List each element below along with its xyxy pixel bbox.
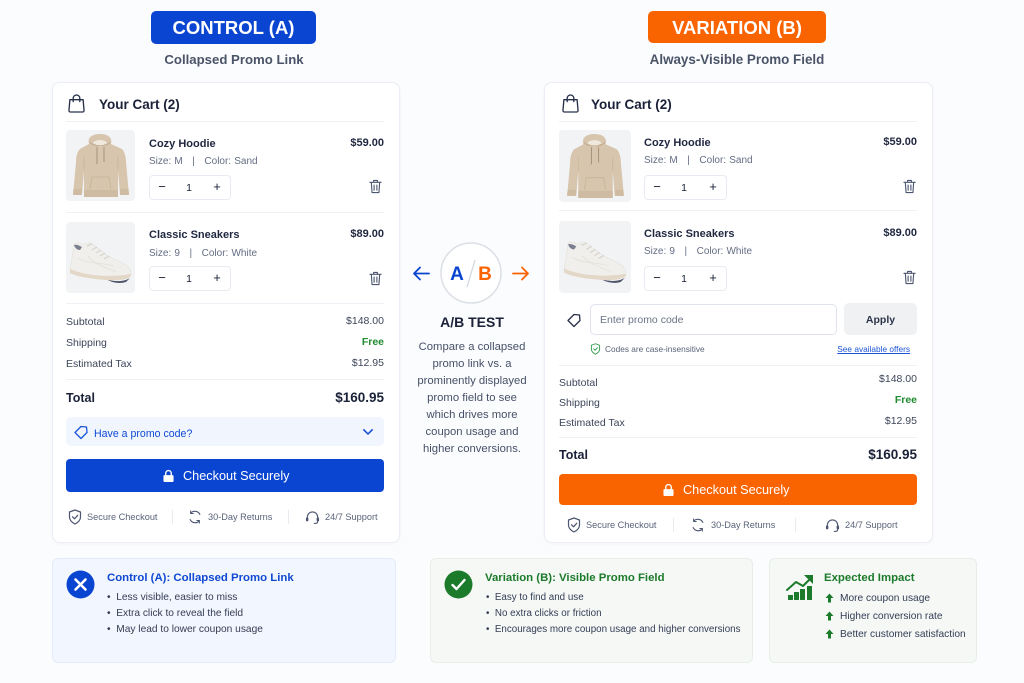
arrow: left blue (413, 266, 430, 280)
card: expected impact (769, 558, 977, 663)
tax row (66, 357, 384, 370)
options: hoodie: Size: M | Color: Sand (149, 156, 258, 167)
subtotal row (559, 373, 917, 389)
shipping row (66, 336, 384, 349)
promo hint: Codes are case-insensitive (605, 344, 705, 354)
card bullets: • Extra click to reveal the field (107, 608, 243, 619)
subtotal row: Subtotal (559, 377, 598, 389)
trust row (568, 517, 898, 533)
icon: lock (663, 484, 674, 496)
badge: control A (151, 11, 316, 44)
impact item: Better customer satisfaction (840, 629, 966, 640)
quantity stepper: hoodie: 1 (681, 182, 687, 194)
product name: hoodie: Cozy Hoodie (644, 137, 711, 149)
returns label: 30-Day Returns (208, 512, 272, 522)
offers link: See available offers (837, 344, 910, 354)
impact item: More coupon usage (840, 593, 930, 604)
tax row: Estimated Tax (66, 358, 132, 370)
cart heading: Your Cart (2) (99, 97, 180, 112)
icon: support (826, 519, 840, 532)
card bullets: • Easy to find and use (486, 592, 584, 603)
description: promo field to see (427, 392, 517, 404)
tax row: Estimated Tax (559, 417, 625, 429)
impact item: Higher conversion rate (840, 611, 942, 622)
shipping row: Shipping (66, 337, 107, 349)
shipping row (559, 394, 917, 409)
icon: trash (369, 272, 382, 286)
quantity stepper: hoodie: − (653, 179, 661, 194)
icon: promo tag (74, 426, 88, 440)
shipping row: Free (362, 336, 384, 348)
card bullets (107, 592, 263, 635)
options: sneakers: Size: 9 | Color: White (149, 248, 257, 259)
A/B test centre column (413, 242, 529, 455)
icon: shield (68, 509, 82, 525)
support label: 24/7 Support (325, 512, 378, 522)
tax row: $12.95 (352, 357, 384, 369)
quantity stepper: sneakers: 1 (186, 273, 192, 285)
quantity stepper: sneakers (644, 266, 727, 291)
card title: Control (A): Collapsed Promo Link (107, 572, 294, 584)
card bullets: • Less visible, easier to miss (107, 592, 237, 603)
options: sneakers: Size: 9 | Color: White (644, 246, 752, 257)
icon: green shield (590, 343, 600, 355)
subtotal row (66, 315, 384, 328)
shipping row: Free (895, 394, 917, 406)
icon: A/B circle (440, 242, 502, 304)
quantity stepper: hoodie (644, 175, 727, 200)
apply button (844, 303, 917, 335)
secure checkout label: Secure Checkout (586, 520, 656, 530)
support label: 24/7 Support (845, 520, 898, 530)
badge: variation B (648, 11, 826, 43)
price: sneakers: $89.00 (883, 227, 917, 239)
promo link text: Have a promo code? (94, 428, 192, 440)
subtotal row: $148.00 (879, 373, 917, 385)
card: variation summary (430, 558, 753, 663)
returns label: 30-Day Returns (711, 520, 775, 530)
cart heading: Your Cart (2) (591, 97, 672, 112)
icon: A/B circle: A (450, 264, 464, 285)
quantity stepper: sneakers: − (158, 270, 166, 285)
icon: chevron (363, 429, 373, 435)
card title: Expected Impact (824, 572, 915, 584)
description: Compare a collapsed (419, 341, 525, 353)
icon: trash (903, 180, 916, 194)
icon: trash (903, 270, 916, 284)
card bullets: • No extra clicks or friction (486, 608, 602, 619)
panel: control cart (52, 82, 400, 543)
description: promo link vs. a (432, 358, 512, 370)
panel: variation cart (544, 82, 933, 543)
product name: sneakers: Classic Sneakers (149, 229, 240, 241)
subtitle: control: Collapsed Promo Link (164, 52, 304, 67)
promo input: Enter promo code (600, 314, 683, 326)
button label: Checkout Securely (683, 483, 790, 497)
options: hoodie: Size: M | Color: Sand (644, 155, 753, 166)
product image: sneakers (559, 221, 631, 293)
quantity stepper: hoodie (149, 175, 231, 200)
icon: shield (568, 517, 580, 533)
quantity stepper: hoodie: + (213, 179, 221, 194)
icon: up arrow (825, 629, 834, 639)
shipping row: Shipping (559, 397, 600, 409)
total row: Total (66, 391, 95, 405)
total row: $160.95 (868, 447, 917, 462)
description: coupon usage and (426, 426, 518, 438)
quantity stepper: hoodie: + (709, 179, 717, 194)
product name: sneakers: Classic Sneakers (644, 228, 735, 240)
icon: returns (692, 518, 704, 532)
icon: bag (562, 94, 579, 113)
icon: promo tag (567, 314, 581, 328)
product image: sneakers (66, 222, 135, 293)
icon: trash (369, 180, 382, 194)
card title: Variation (B): Visible Promo Field (485, 572, 665, 584)
icon: lock (163, 470, 174, 482)
tax row (559, 415, 917, 429)
icon: A/B circle: B (478, 264, 492, 285)
quantity stepper: sneakers: + (709, 270, 717, 285)
product image: hoodie (559, 130, 631, 202)
card bullets: • Encourages more coupon usage and higher conversions (486, 624, 740, 635)
card bullets (486, 592, 740, 635)
description: higher conversions. (423, 443, 521, 455)
secure checkout label: Secure Checkout (87, 512, 157, 522)
button label: Checkout Securely (183, 469, 290, 483)
tax row: $12.95 (885, 415, 917, 427)
arrow: right orange (512, 266, 529, 280)
quantity stepper: sneakers (149, 266, 231, 291)
icon: x badge (66, 570, 94, 598)
description: prominently displayed (417, 375, 527, 387)
quantity stepper: hoodie: 1 (186, 182, 192, 194)
quantity stepper: sneakers: 1 (681, 273, 687, 285)
promo input (590, 304, 837, 335)
subtotal row: Subtotal (66, 316, 105, 328)
apply button: Apply (866, 314, 895, 326)
description: which drives more (426, 409, 518, 421)
price: hoodie: $59.00 (350, 137, 384, 149)
icon: growth chart (786, 575, 813, 600)
card bullets: • May lead to lower coupon usage (107, 624, 263, 635)
product image: hoodie (66, 130, 135, 201)
icon: support (306, 511, 320, 524)
heading: A/B TEST: A/B TEST (440, 314, 504, 330)
icon: check badge (444, 570, 472, 598)
subtitle: variation: Always-Visible Promo Field (650, 52, 824, 67)
icon: returns (190, 510, 200, 524)
icon: up arrow (826, 594, 834, 602)
price: hoodie: $59.00 (883, 136, 917, 148)
quantity stepper: sneakers: + (213, 270, 221, 285)
checkout button (66, 459, 384, 492)
total row (559, 447, 917, 462)
icon: bag (68, 94, 85, 113)
quantity stepper: sneakers: − (653, 270, 661, 285)
total row: Total (559, 448, 588, 462)
collapsed promo link (66, 417, 384, 446)
quantity stepper: hoodie: − (158, 179, 166, 194)
total row (66, 390, 384, 405)
checkout button (559, 474, 917, 505)
badge: control A: CONTROL (A) (173, 17, 294, 38)
price: sneakers: $89.00 (350, 228, 384, 240)
total row: $160.95 (335, 390, 384, 405)
description (417, 341, 527, 455)
card: control summary (52, 558, 396, 663)
subtotal row: $148.00 (346, 315, 384, 327)
trust row (68, 509, 378, 525)
product name: hoodie: Cozy Hoodie (149, 138, 216, 150)
icon: up arrow (826, 612, 834, 620)
badge: variation B: VARIATION (B) (672, 17, 802, 38)
